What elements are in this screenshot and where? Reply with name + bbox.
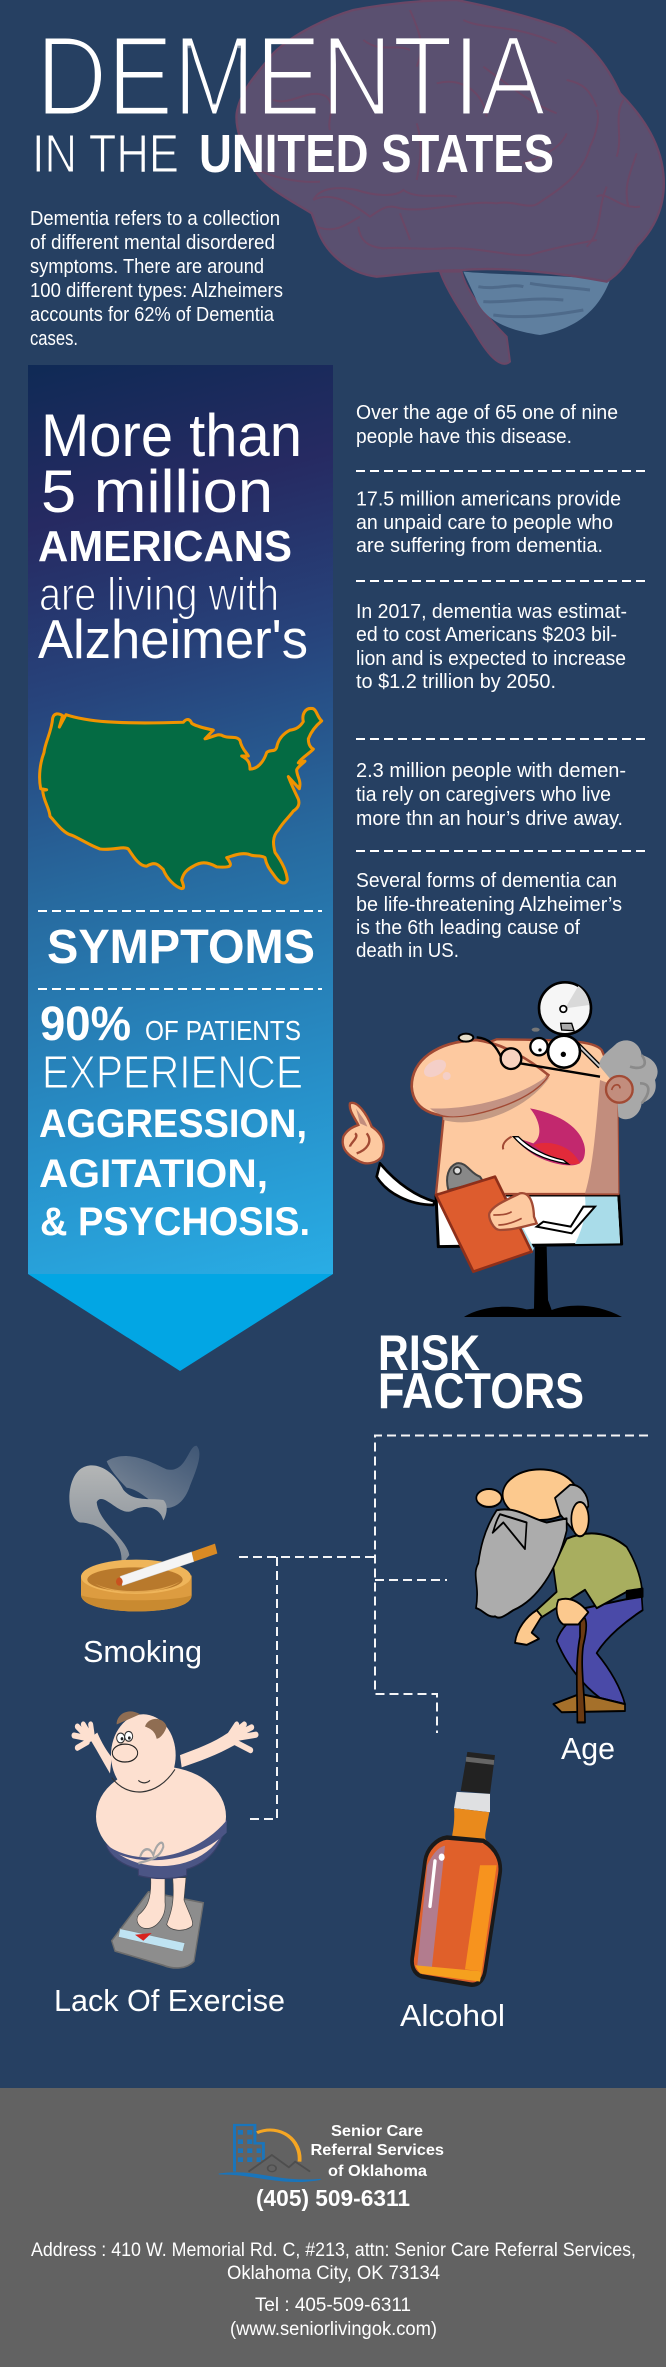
fact: cost: to $1.2 trillion by 2050. xyxy=(356,671,556,693)
intro text block: 100 different types: Alzheimers xyxy=(30,280,283,302)
fact: unpaid care: an unpaid care to people who xyxy=(356,512,613,534)
fact: cost: lion and is expected to increase xyxy=(356,648,626,670)
icon: old man with cane xyxy=(476,1469,643,1722)
intro text block: Dementia refers to a collection xyxy=(30,208,280,230)
logo name: of Oklahoma xyxy=(328,2163,427,2180)
facts column xyxy=(356,402,627,962)
fact: life-threatening: be life-threatening Alzheimer’s xyxy=(356,894,622,916)
label: alcohol: Alcohol xyxy=(400,1998,505,2033)
intro text block: symptoms. There are around xyxy=(30,256,264,278)
fact: life-threatening: is the 6th leading cause of xyxy=(356,917,580,939)
banner arrow tip xyxy=(28,1274,333,1371)
fact: caregivers: tia rely on caregivers who live xyxy=(356,784,611,806)
intro text block xyxy=(30,208,283,350)
panel: Alzheimer's and symptoms banner xyxy=(28,365,333,1371)
headline: more than 5 million: AMERICANS xyxy=(38,522,292,571)
risk factor: alcohol xyxy=(400,1752,505,2033)
address and contact details: Tel : 405-509-6311 xyxy=(255,2295,411,2316)
fact: unpaid care xyxy=(356,488,621,557)
fact: over 65 xyxy=(356,402,618,448)
headline: more than 5 million: are living with xyxy=(39,568,279,620)
headline: more than 5 million: 5 million xyxy=(41,458,273,525)
icon: ashtray and cigarette xyxy=(69,1446,217,1611)
fact: caregivers: 2.3 million people with demen- xyxy=(356,760,626,782)
phone number: (405) 509-6311 xyxy=(256,2185,410,2211)
icon: overweight man on scale xyxy=(74,1711,256,1968)
heading: risk factors xyxy=(378,1325,584,1419)
logo name xyxy=(310,2123,444,2180)
title: UNITED STATES xyxy=(199,124,554,184)
heading: risk factors: FACTORS xyxy=(378,1363,584,1419)
label: age: Age xyxy=(561,1731,615,1766)
footer background xyxy=(0,2088,666,2367)
symptoms statistic text: EXPERIENCE xyxy=(42,1046,303,1098)
symptoms statistic text: OF PATIENTS xyxy=(145,1015,301,1046)
banner body xyxy=(28,365,333,1274)
fact: cost xyxy=(356,601,627,693)
address and contact details: Oklahoma City, OK 73134 xyxy=(227,2263,440,2284)
logo name: Referral Services xyxy=(310,2142,444,2159)
intro text block: accounts for 62% of Dementia xyxy=(30,304,275,326)
address and contact details: (www.seniorlivingok.com) xyxy=(230,2319,437,2340)
risk factor: smoking xyxy=(69,1446,217,1669)
icon: senior care logo xyxy=(219,2125,321,2182)
fact: life-threatening: Several forms of dementia can xyxy=(356,870,617,892)
logo name: Senior Care xyxy=(331,2123,423,2140)
intro text block: of different mental disordered xyxy=(30,232,275,254)
icon: map of the United States xyxy=(40,708,322,889)
headline: more than 5 million: Alzheimer's xyxy=(38,608,308,670)
heading: risk factors: RISK xyxy=(378,1325,480,1381)
fact: life-threatening xyxy=(356,870,622,962)
symptoms statistic text xyxy=(39,998,310,1244)
fact: caregivers xyxy=(356,760,626,830)
fact: over 65: people have this disease. xyxy=(356,426,572,448)
icon: doctor xyxy=(343,982,658,1317)
heading: symptoms: SYMPTOMS xyxy=(47,921,315,974)
label: smoking: Smoking xyxy=(83,1634,202,1669)
fact: life-threatening: death in US. xyxy=(356,940,459,962)
fact: over 65: Over the age of 65 one of nine xyxy=(356,402,618,424)
panel: footer xyxy=(0,2088,666,2367)
fact: cost: In 2017, dementia was estimat- xyxy=(356,601,627,623)
fact: cost: ed to cost Americans $203 bil- xyxy=(356,624,617,646)
address and contact details: Address : 410 W. Memorial Rd. C, #213, attn: Senior Care Referral Services, xyxy=(31,2240,636,2261)
fact: caregivers: more thn an hour’s drive away. xyxy=(356,808,623,830)
fact: unpaid care: 17.5 million americans provide xyxy=(356,488,621,510)
fact: unpaid care: are suffering from dementia. xyxy=(356,535,603,557)
title: IN THE xyxy=(32,124,179,184)
symptoms statistic text: AGITATION, xyxy=(39,1152,268,1196)
icon: brain xyxy=(236,0,664,364)
intro text block: cases. xyxy=(30,328,78,350)
headline: more than 5 million xyxy=(38,402,308,670)
symptoms statistic text: & PSYCHOSIS. xyxy=(40,1200,310,1244)
address and contact details xyxy=(31,2240,636,2340)
title xyxy=(32,13,554,184)
icon: whiskey bottle xyxy=(412,1752,500,1985)
risk factor: lack of exercise xyxy=(54,1711,285,2018)
risk factor: age xyxy=(476,1469,643,1766)
symptoms statistic text: AGGRESSION, xyxy=(39,1102,307,1146)
headline: more than 5 million: More than xyxy=(41,402,302,469)
symptoms statistic text: 90% xyxy=(40,998,131,1051)
title: DEMENTIA xyxy=(36,13,547,139)
label: lack of exercise: Lack Of Exercise xyxy=(54,1983,285,2018)
